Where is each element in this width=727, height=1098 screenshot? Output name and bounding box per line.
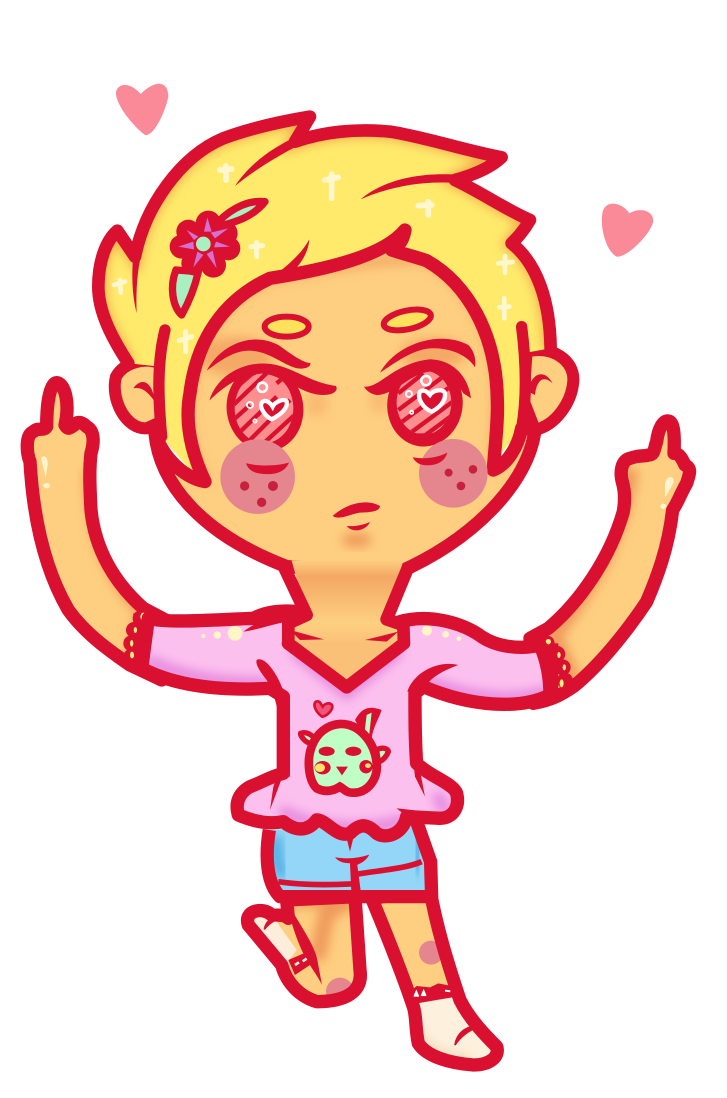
collar creases — [290, 630, 398, 642]
hair clip: flower — [170, 211, 240, 278]
shorts — [267, 822, 432, 898]
shirt print: mascot — [301, 708, 388, 793]
shirt — [123, 610, 573, 836]
hair — [98, 117, 551, 487]
crease: knee — [287, 902, 322, 985]
shorts hem stripes and fly — [278, 862, 422, 885]
left eye — [226, 374, 304, 448]
hair clip: leaves — [172, 201, 265, 315]
sleeve and side creases — [243, 615, 458, 823]
hair creases — [132, 135, 460, 313]
left cheek blush — [220, 439, 295, 514]
head — [98, 117, 573, 573]
right cheek blush — [413, 439, 488, 508]
highlight: hand — [660, 477, 674, 509]
left arm — [27, 383, 172, 680]
left ear — [115, 361, 162, 428]
toe crease — [455, 1026, 478, 1045]
heart: top left — [116, 84, 168, 135]
highlight: hand — [41, 456, 50, 488]
anklet — [410, 983, 460, 1004]
right leg and foot — [372, 890, 507, 1073]
shirt print: small heart — [314, 701, 332, 717]
heart: top right — [602, 204, 653, 257]
right arm — [530, 421, 690, 703]
toe crease — [264, 915, 287, 929]
collar outline — [283, 564, 407, 687]
anklet — [288, 950, 315, 975]
neck and chest — [283, 561, 407, 687]
face — [155, 230, 535, 573]
highlights: sleeves — [201, 626, 461, 641]
right eye — [387, 372, 463, 446]
left leg and foot — [248, 897, 360, 1006]
sparkles: hair — [114, 166, 513, 352]
eyelids and lashes — [207, 339, 475, 401]
right ear — [523, 350, 573, 430]
forehead marks — [265, 306, 433, 337]
cuffs: lace trim — [123, 610, 573, 693]
mouth — [333, 502, 380, 530]
